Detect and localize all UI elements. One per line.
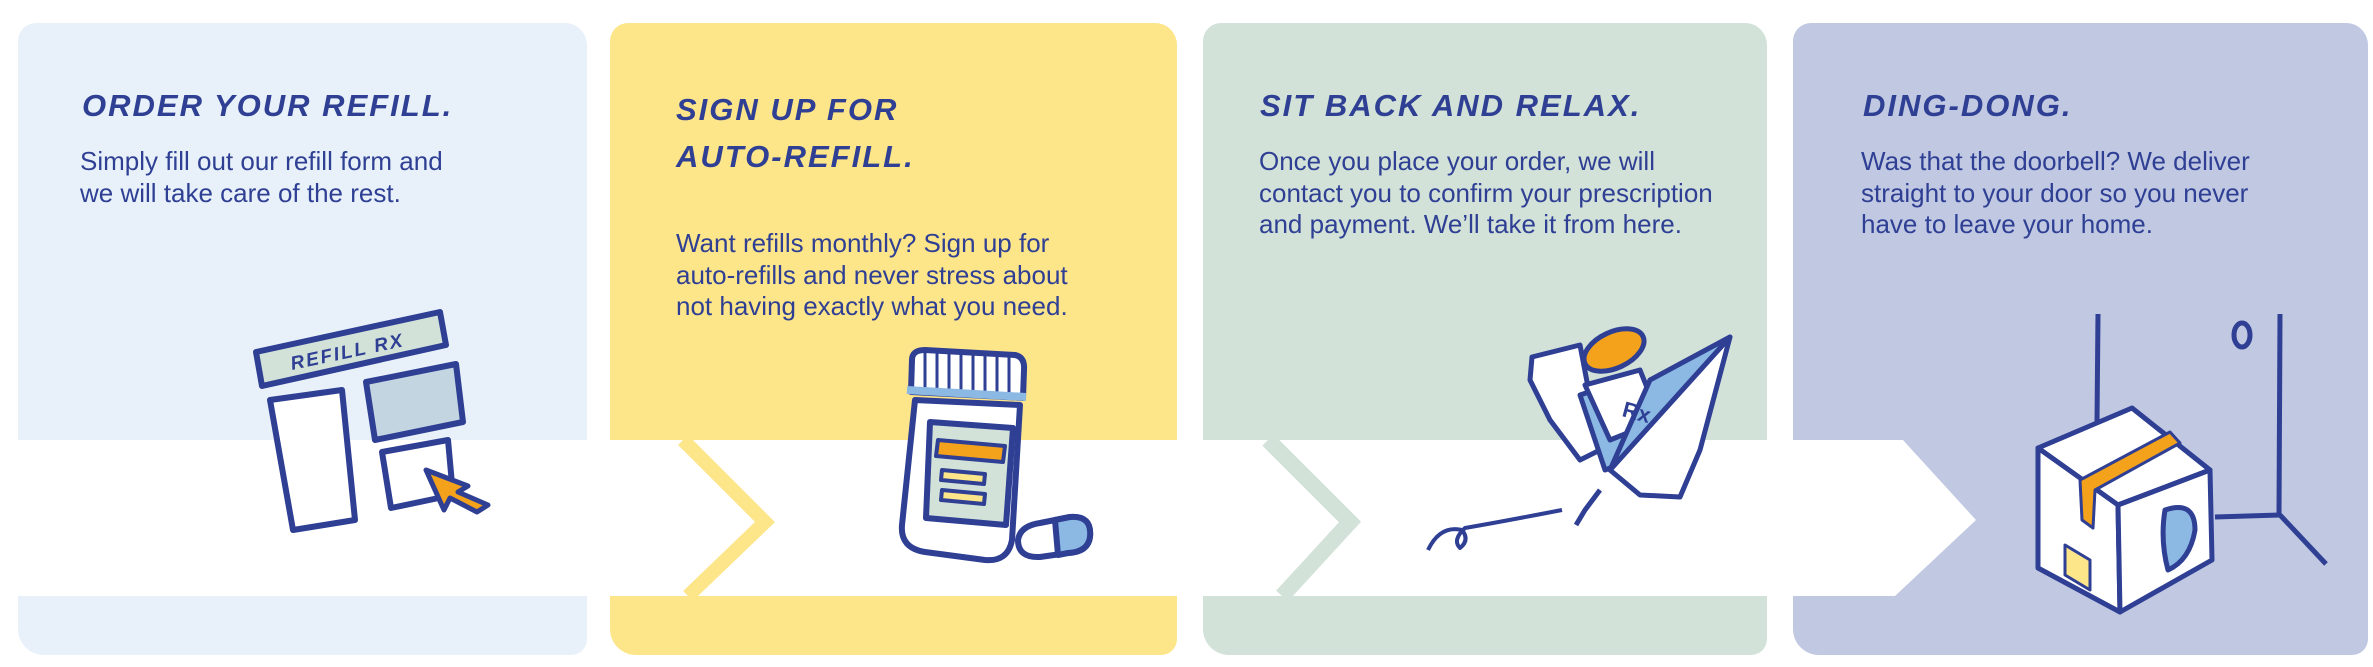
text: order your refill: [80, 146, 443, 208]
text: ding-dong: straight to your door so you never: [1861, 178, 2248, 208]
icon: pill bottle: [902, 350, 1090, 560]
text: order your refill: Simply fill out our refill form and: [80, 146, 443, 176]
heading: sign up for auto-refill: AUTO-REFILL.: [676, 139, 915, 174]
icon: paper plane with bottle: [1428, 320, 1730, 550]
text: sit back: and payment. We’ll take it from here.: [1259, 209, 1682, 239]
heading: sign up for auto-refill: [675, 92, 915, 174]
heading: ding-dong: DING-DONG.: [1863, 88, 2072, 123]
heading: sit back and relax: SIT BACK AND RELAX.: [1260, 88, 1641, 123]
panel: sign up for auto-refill: [610, 23, 1177, 655]
heading: order your refill: ORDER YOUR REFILL.: [82, 88, 453, 123]
text: sign up: [676, 228, 1068, 321]
heading: sign up for auto-refill: SIGN UP FOR: [676, 92, 898, 127]
text: ding-dong: have to leave your home.: [1861, 209, 2153, 239]
text: sign up: Want refills monthly? Sign up for: [676, 228, 1049, 258]
text: sit back: [1259, 146, 1713, 239]
panel: order your refill: [18, 23, 587, 655]
text: ding-dong: Was that the doorbell? We deliver: [1861, 146, 2250, 176]
icon: door and package: [2038, 314, 2326, 612]
text: sit back: Once you place your order, we will: [1259, 146, 1655, 176]
icon: refill form: REFILL RX: [289, 330, 406, 375]
text: sit back: contact you to confirm your prescription: [1259, 178, 1713, 208]
text: order your refill: we will take care of the rest.: [80, 178, 401, 208]
icon: paper plane with bottle: Rx: [1620, 397, 1654, 428]
panel: sit back and relax: [1203, 23, 1767, 655]
text: sign up: not having exactly what you need.: [676, 291, 1068, 321]
text: sign up: auto-refills and never stress about: [676, 260, 1068, 290]
panel: ding-dong: [1793, 23, 2368, 655]
icon: refill form: [256, 312, 488, 530]
text: ding-dong: [1861, 146, 2250, 239]
